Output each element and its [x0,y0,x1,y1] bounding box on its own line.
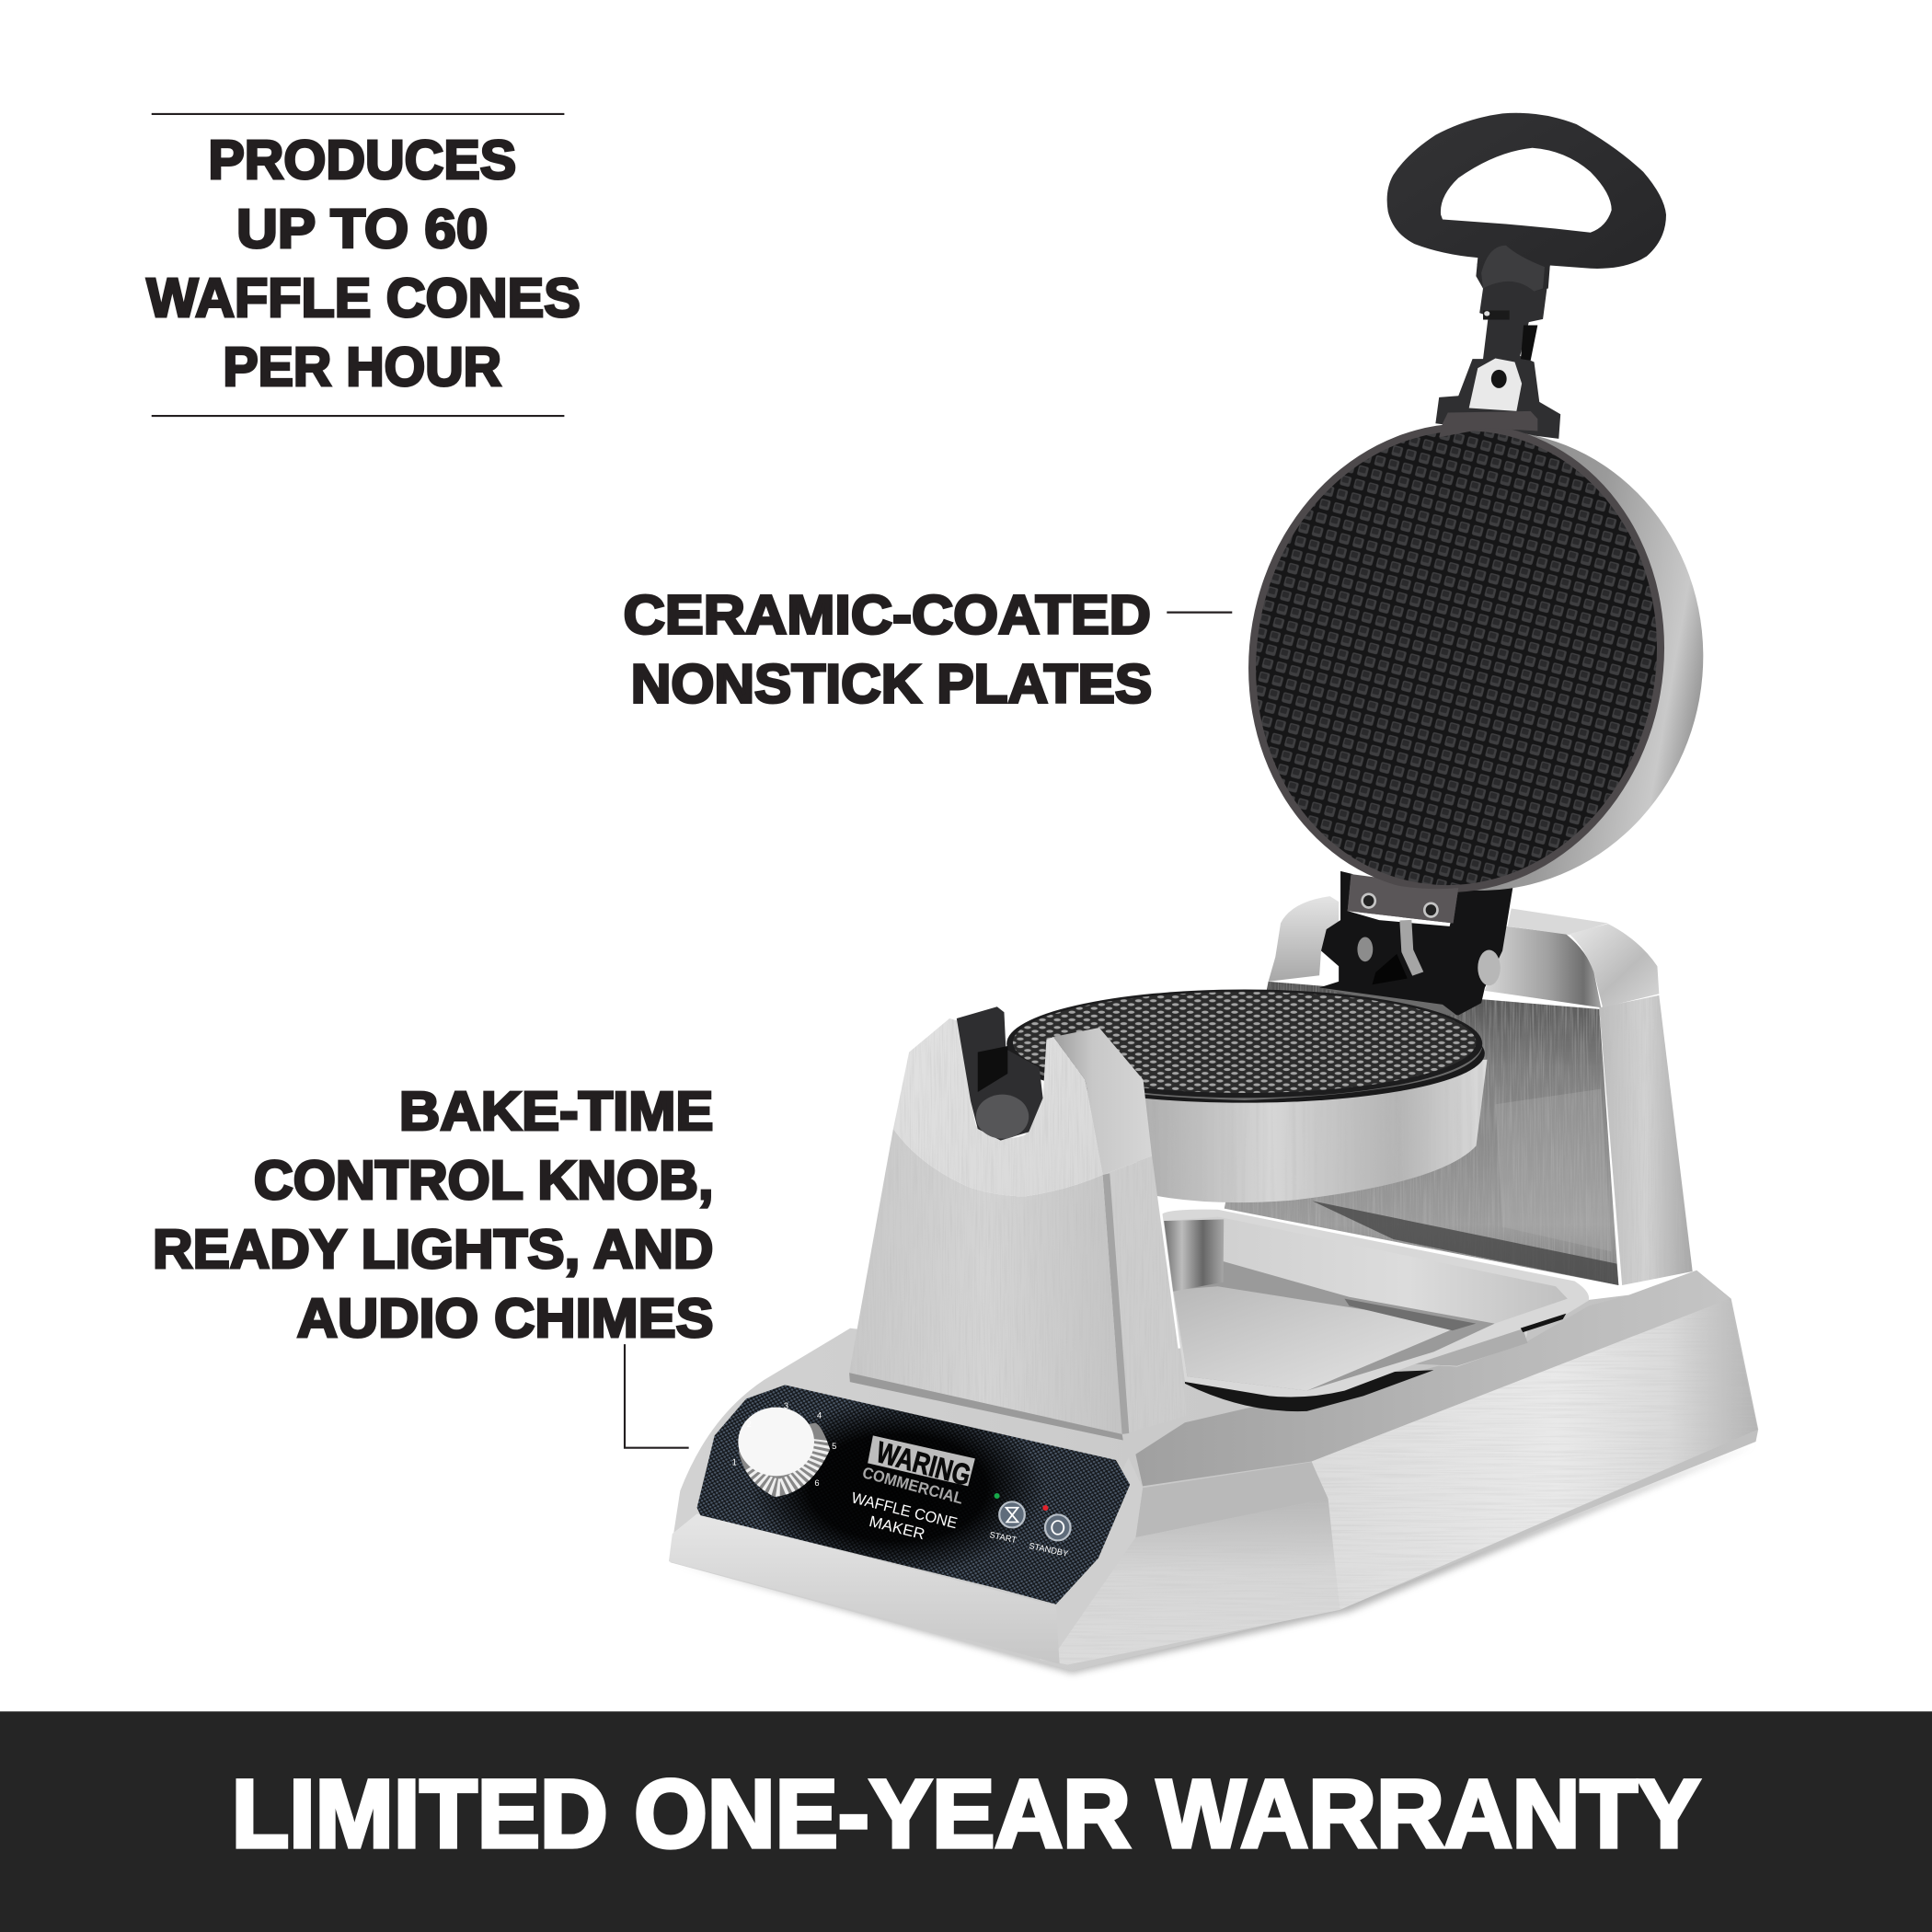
panel text: 1 [732,1457,737,1466]
callout: nonstick plates [624,585,1232,714]
panel text: 6 [814,1478,820,1488]
standby button [1045,1514,1071,1540]
hinge [1319,871,1513,1016]
tower side [1103,1156,1187,1434]
panel text: COMMERCIAL [860,1463,965,1508]
base panel edge [1040,1458,1143,1663]
Waring logo plate [868,1435,975,1486]
tray corner reflection [1164,1219,1224,1292]
base top surface [1135,1271,1730,1486]
callout: production rate [146,114,581,416]
lower plate [1005,989,1488,1202]
dial knob [738,1408,830,1497]
base right facet [1312,1299,1757,1610]
warranty banner: LIMITED ONE-YEAR WARRANTY [232,1761,1700,1869]
left support tower [849,1006,1187,1440]
callout: controls [153,1082,713,1448]
base front-right facet [1040,1499,1340,1664]
panel text: STANDBY [1028,1541,1070,1558]
panel text: START [989,1530,1018,1545]
callout: production rate: UP TO 60 [236,200,488,259]
panel text: 5 [832,1442,836,1451]
top bracket [1439,411,1537,437]
standby icon [1052,1521,1064,1535]
lid: handle [1387,113,1666,439]
floor shadow [675,1444,1755,1673]
front lip [669,1513,1060,1664]
tower slot [957,1006,1043,1141]
panel text: WARING [873,1435,974,1492]
product: waffle cone maker [669,113,1758,1673]
panel text: WAFFLE CONE [850,1489,960,1532]
callout: nonstick plates: NONSTICK PLATES [631,654,1152,714]
ready light green [995,1493,1000,1499]
callout: controls: AUDIO CHIMES [297,1289,713,1349]
panel text: 4 [817,1411,822,1420]
back tower [1225,896,1693,1285]
start button [999,1501,1025,1527]
callout: controls: BAKE-TIME [399,1082,713,1142]
callout: production rate: PRODUCES [208,131,516,190]
base [669,1271,1758,1671]
lid: lower bracket [1348,874,1458,924]
tower cap [893,1018,1103,1196]
start icon [1006,1508,1018,1522]
warranty banner [0,1711,1932,1932]
callout: nonstick plates: CERAMIC-COATED [624,585,1151,645]
control panel [697,1385,1130,1604]
panel text: 2 [747,1420,752,1429]
panel text [732,1401,1070,1558]
panel text: MAKER [868,1512,926,1543]
callout: controls: CONTROL KNOB, [254,1151,713,1211]
lid: upper plate [1212,390,1740,926]
tower lower front [849,1129,1122,1434]
callout: production rate: PER HOUR [223,338,501,397]
base corner bevel [1135,1462,1328,1537]
cap bevel [1053,1028,1152,1175]
callout: production rate: WAFFLE CONES [146,269,581,328]
panel text: 3 [784,1401,788,1410]
drip tray [1162,1210,1589,1411]
ready light red [1042,1505,1048,1511]
callout: controls: READY LIGHTS, AND [153,1220,713,1280]
